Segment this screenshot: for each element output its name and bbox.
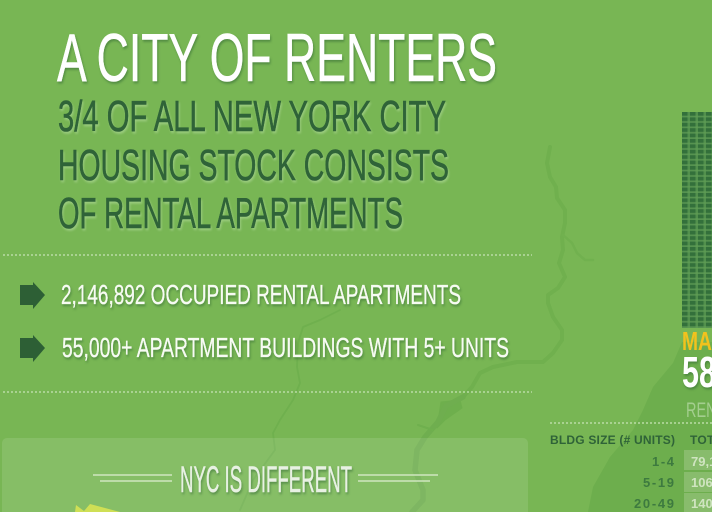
stat text: 55,000+ APARTMENT BUILDINGS WITH 5+ UNITS [62, 332, 509, 363]
table row labels: 20-49 [634, 496, 674, 511]
dotted divider top [3, 254, 532, 256]
subtitle: OF RENTAL APARTMENTS [58, 189, 403, 238]
dotted divider table [550, 422, 712, 424]
table row labels: 5-19 [643, 475, 674, 490]
icon: yellow arrow tip [75, 504, 120, 512]
subtitle: 3/4 OF ALL NEW YORK CITY [58, 92, 446, 141]
icon: arrow bullet [20, 335, 45, 362]
table value cells [684, 450, 712, 512]
map: land and rivers [240, 147, 712, 512]
stat: occupied rental apartments [20, 279, 461, 310]
chart: Manhattan rental unit grid [682, 112, 712, 328]
table row labels [634, 454, 675, 511]
subtitle [58, 92, 449, 238]
stat text: 2,146,892 OCCUPIED RENTAL APARTMENTS [61, 279, 461, 310]
table header: BLDG SIZE (# UNITS) [550, 433, 675, 447]
stat: apartment buildings [20, 332, 509, 363]
subtitle: HOUSING STOCK CONSISTS [58, 141, 449, 190]
icon: arrow bullet [20, 282, 45, 309]
dotted divider bottom [3, 391, 532, 393]
title: A CITY OF RENTERS [57, 20, 497, 96]
table: building size [550, 433, 712, 512]
heading: NYC IS DIFFERENT [180, 459, 352, 500]
panel: NYC is different [2, 438, 528, 512]
table row labels: 1-4 [652, 454, 675, 469]
heading rules [93, 475, 438, 481]
